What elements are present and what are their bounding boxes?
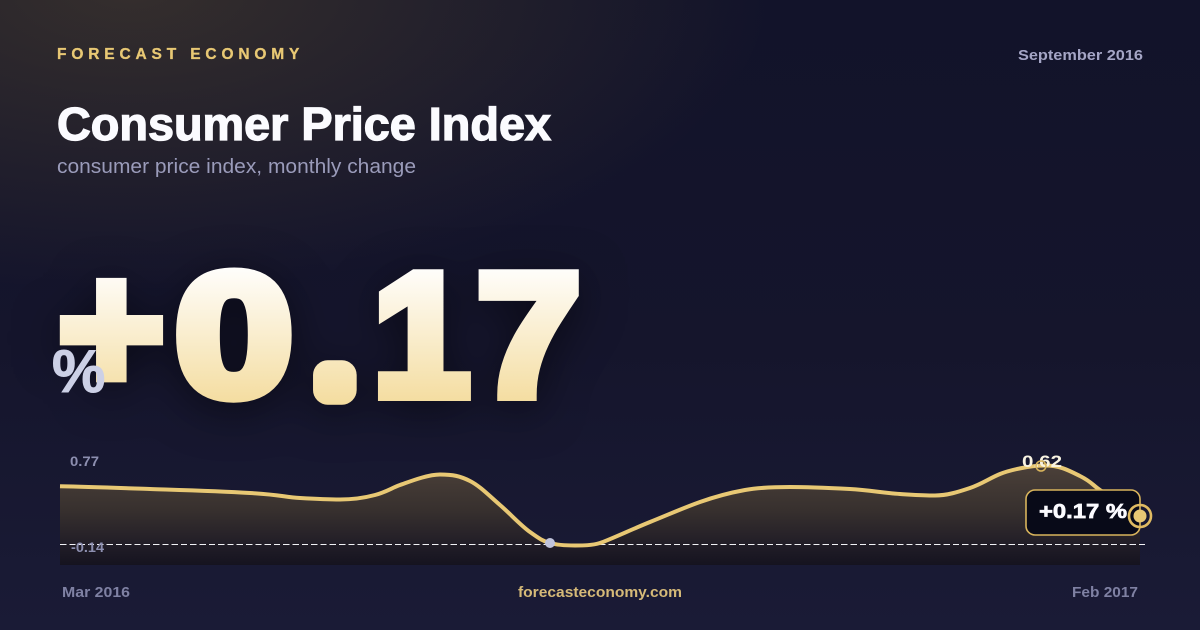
title: Consumer Price Index [57,98,551,150]
line series [60,466,1140,546]
min point [545,538,555,548]
date: September 2016 [1018,47,1143,64]
baseline [60,544,1146,546]
big value: + [57,225,166,432]
chart [60,452,1151,565]
big value: 1 [373,237,470,432]
value callout: +0.17 % [1039,500,1127,523]
latest point [1129,505,1151,527]
peak marker [1036,461,1046,471]
end month: Feb 2017 [1072,585,1138,601]
brand label: FORECAST ECONOMY [57,46,304,63]
big value: 7 [477,239,581,433]
value callout [1026,490,1140,535]
big value [57,225,581,433]
start month: Mar 2016 [62,585,130,601]
website: forecasteconomy.com [518,585,682,601]
axis min: -0.14 [71,540,105,555]
axis max: 0.77 [70,454,99,469]
big value: 0 [175,238,293,433]
percent sign: % [52,338,105,405]
peak label: 0.62 [1022,452,1062,471]
big value: . [321,300,349,412]
subtitle: consumer price index, monthly change [57,156,416,178]
chart area [60,466,1140,565]
